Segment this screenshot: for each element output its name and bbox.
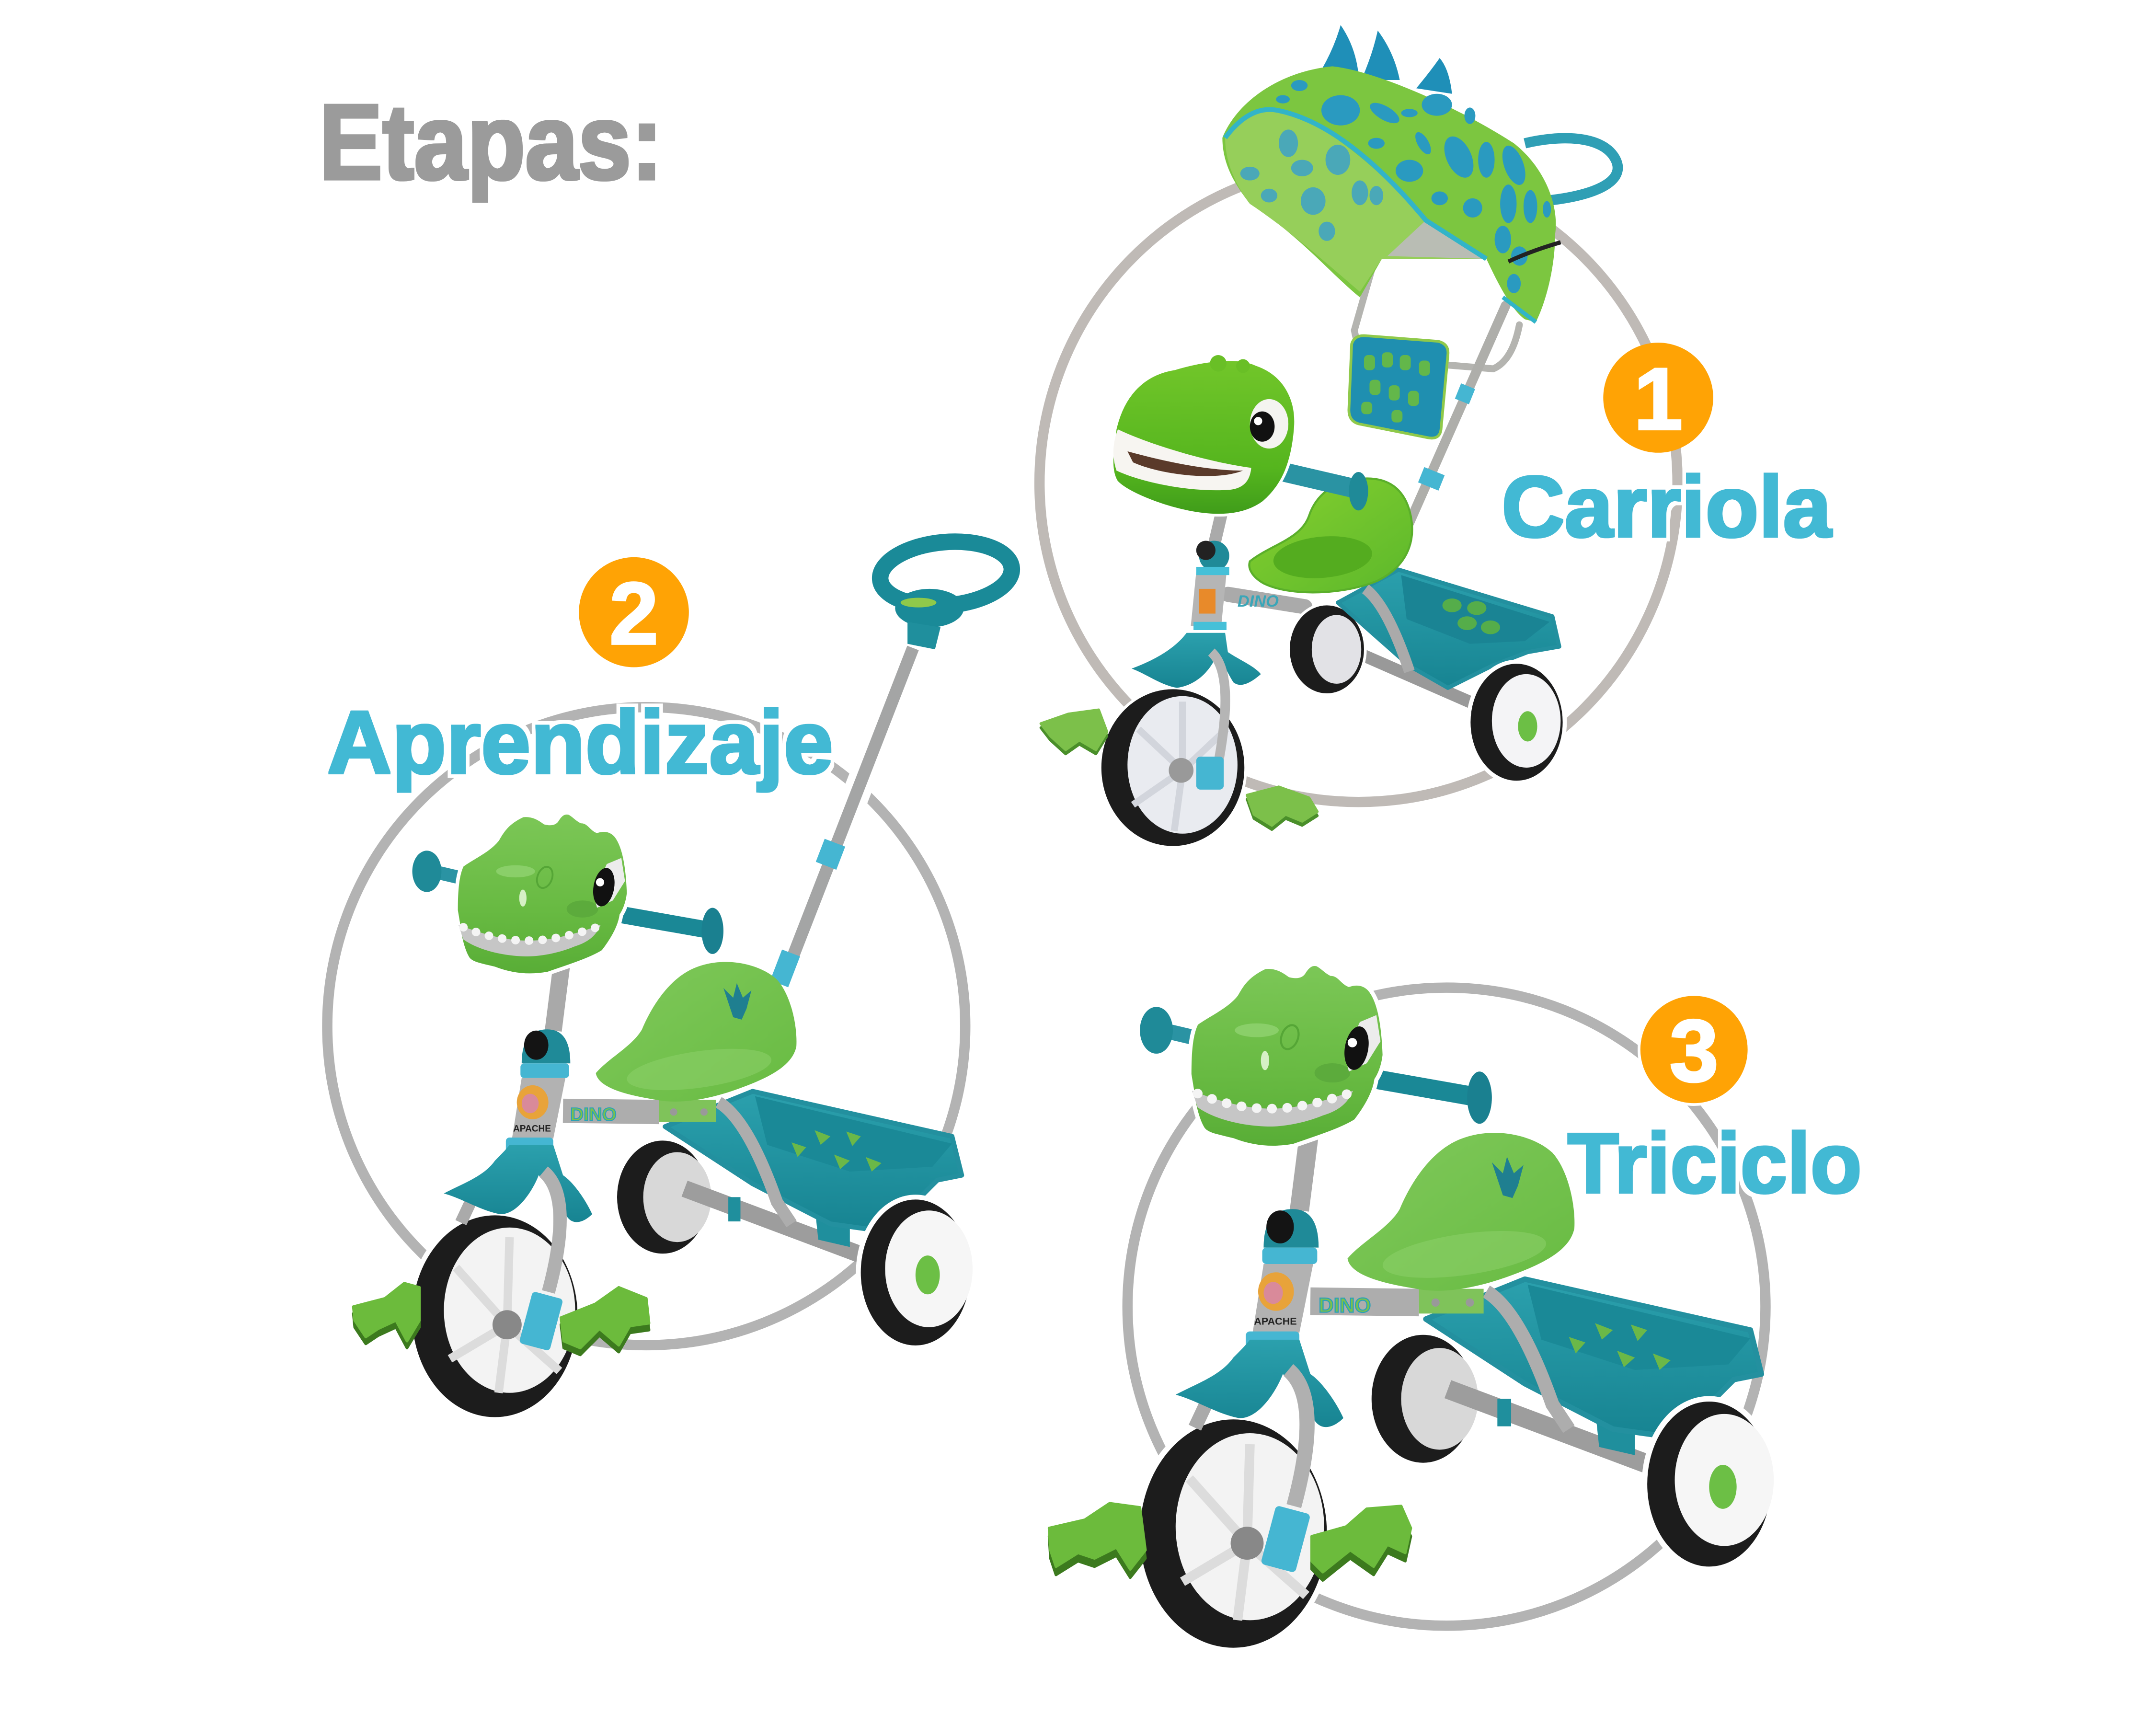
support strut [1365,589,1410,671]
stem and head tube [1193,498,1229,630]
handlebar right [1379,1071,1492,1124]
seat mount [659,1100,716,1122]
sticker dino: DINO [1238,592,1279,610]
seat mount [1419,1289,1484,1313]
sticker dino: DINO [1319,1294,1371,1317]
pole collars [770,839,845,987]
stage 2: aprendizaje [327,537,1014,1420]
push handle ring [1525,138,1618,201]
left fork [1195,1404,1206,1428]
rear left wheel [1369,1333,1478,1465]
trike 2 drawing [410,813,973,1420]
fork and crank [1196,652,1225,790]
handlebar grip [1277,471,1368,510]
badge 3 [1639,995,1749,1104]
stage 1: carriola [1040,25,1832,847]
frame [1310,1291,1569,1429]
rear right wheel [1468,662,1565,783]
label triciclo: Triciclo [1568,1116,1862,1211]
rear right wheel [859,1197,973,1348]
ring [1127,988,1766,1626]
title: Etapas: [319,82,663,202]
left fork [461,1202,470,1223]
right pedal [1247,787,1317,829]
right pedal [561,1288,649,1355]
right pedal [1312,1506,1411,1580]
seat [596,962,796,1102]
dino head [1189,964,1385,1148]
push pole [782,648,913,984]
badge 3: 3 [1670,1001,1719,1100]
ring [1040,164,1677,802]
handlebar left [1140,1007,1210,1054]
basket [665,1092,962,1230]
label carriola: Carriola [1502,459,1832,555]
frame [563,1102,791,1224]
stem and head tube: APACHE [513,1124,551,1134]
left pedal [354,1283,419,1348]
handlebar right [624,908,723,954]
pole collars [1418,383,1475,491]
badge 1: 1 [1634,350,1683,448]
seat [1249,479,1412,592]
stem and head tube: APACHE [1254,1315,1297,1327]
ring [327,707,965,1345]
fork and crank [1261,1370,1311,1573]
front wheel [1137,1417,1330,1650]
stage 3: triciclo [1049,964,1862,1650]
basket struts [728,1197,850,1247]
dino head [456,813,629,975]
stem and head tube [506,964,570,1155]
rear left wheel [1288,604,1365,695]
frame tubes [1228,253,1519,704]
badge 2: 2 [609,564,658,663]
rear right wheel [1644,1399,1774,1569]
basket [1338,570,1559,688]
label aprendizaje: Aprendizaje [327,692,833,792]
fender [1176,1340,1343,1427]
handlebar left [412,851,474,892]
handle ring [878,537,1014,649]
rear axle [685,1189,869,1258]
canopy [1222,66,1560,322]
trike 1 drawing [1041,25,1618,847]
rear left wheel [615,1139,711,1255]
seat pad [1349,335,1448,438]
basket [1426,1279,1761,1436]
badge 2 [579,557,689,667]
stem and head tube [1246,1135,1319,1351]
rear axle [1448,1389,1657,1468]
canopy spikes [1319,25,1452,94]
left pedal [1041,710,1107,754]
front wheel [410,1213,580,1420]
sticker dino: DINO [570,1104,617,1125]
left pedal [1049,1503,1146,1577]
front wheel [1100,688,1246,847]
dino head [1112,355,1296,515]
seat [1347,1133,1574,1291]
badge 1 [1603,343,1713,453]
fender [1132,633,1261,688]
basket struts [1497,1399,1635,1455]
fender [444,1145,592,1222]
fork and crank [519,1172,563,1351]
